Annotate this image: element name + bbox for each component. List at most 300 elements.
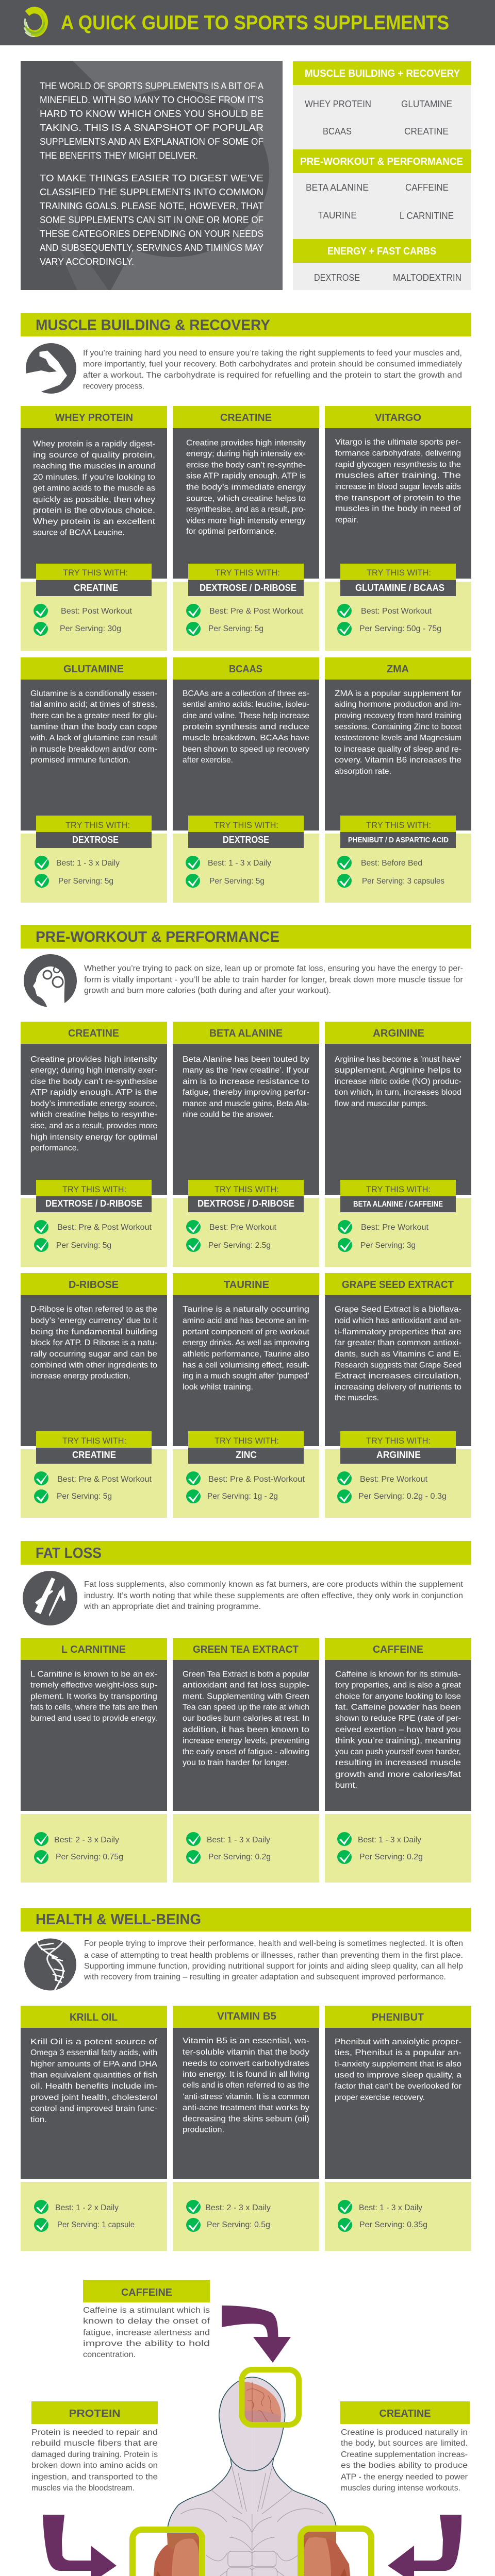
dosage [35, 856, 120, 888]
dosage: Best: Pre & Post Workout [57, 1223, 152, 1232]
description: into energy. It is found in all living [183, 2070, 309, 2079]
dosage: Per Serving: 5g [208, 624, 263, 633]
dosage: Best: 1 - 3 x Daily [359, 2204, 422, 2212]
dosage [186, 604, 304, 636]
description: ercise the body can’t re-synthe- [186, 461, 306, 470]
description: ing in a much sought after ’pumped’ [183, 1371, 309, 1381]
description: ti-anxiety supplement that is also [335, 2060, 461, 2069]
dosage: Per Serving: 0.75g [56, 1853, 123, 1861]
section heading: pre-workout and performance [21, 925, 471, 948]
dosage [34, 1471, 152, 1503]
intro text: SUPPLEMENTS AND AN EXPLANATION OF SOME OF [40, 137, 263, 147]
callout: protein: Protein is needed to repair and [31, 2428, 158, 2437]
card title: GREEN TEA EXTRACT [193, 1644, 299, 1655]
dosage: Per Serving: 0.2g [208, 1853, 271, 1861]
callout: creatine: the body, but sources are limited. [341, 2439, 468, 2448]
section heading: pre-workout and performance: PRE-WORKOUT & PERFORMANCE [36, 929, 279, 945]
description: think you’re training), meaning [335, 1736, 461, 1745]
category: energy: DEXTROSE [314, 273, 360, 283]
description: cells and is often referred to as the [183, 2081, 309, 2090]
try this with: TRY THIS WITH: [366, 820, 431, 830]
description: Creatine provides high intensity [186, 439, 306, 447]
try this with: DEXTROSE [223, 835, 269, 845]
description: used to improve sleep quality, a [335, 2071, 461, 2079]
category: muscle building: BCAAS [323, 126, 352, 137]
try this with: TRY THIS WITH: [214, 1436, 279, 1446]
callout: protein: rebuild muscle fibers that are [31, 2439, 158, 2448]
dosage: Per Serving: 50g - 75g [359, 624, 441, 633]
description: decreasing the skins sebum (oil) [183, 2114, 309, 2124]
description: higher amounts of EPA and DHA [30, 2060, 157, 2069]
card title: GLUTAMINE [63, 664, 124, 675]
section intro: pre-workout: form is vitally important - you’ll be able to train harder for longer, break down more muscle tissue for [84, 976, 464, 984]
try this with: TRY THIS WITH: [366, 1184, 431, 1194]
description: rapid glycogen resynthesis to the [335, 461, 461, 469]
description [183, 1670, 310, 1767]
description: after exercise. [183, 756, 233, 765]
body silhouette [146, 2377, 358, 2576]
description: energy; during high intensity ex- [186, 449, 306, 459]
description: far greater than common antioxi- [335, 1338, 461, 1347]
highlight: right arm muscles [301, 2529, 371, 2576]
description: high intensity energy for optimal [30, 1133, 157, 1142]
dosage [338, 1220, 429, 1252]
try this with: TRY THIS WITH: [62, 1436, 126, 1446]
description: combined with other ingredients to [30, 1361, 157, 1369]
card title: ARGININE [373, 1028, 424, 1039]
description: addition, it has been known to [183, 1725, 309, 1734]
description: increase energy levels, preventing [183, 1736, 309, 1745]
description: control and improved brain func- [30, 2104, 157, 2113]
section intro: muscle: If you’re training hard you need to ensure you’re taking the right supplements to feed your muscles and, [83, 349, 462, 358]
dosage: Best: Before Bed [361, 859, 422, 868]
description: production. [183, 2126, 224, 2134]
description: muscle breakdown. BCAAs have [183, 734, 309, 742]
description: source of BCAA Leucine. [33, 529, 125, 537]
description: oil. Health benefits include im- [30, 2082, 157, 2091]
dosage: Best: Pre & Post-Workout [208, 1475, 305, 1484]
try this with: GLUTAMINE / BCAAS [355, 583, 444, 593]
description: L Carnitine is known to be an ex- [30, 1670, 157, 1679]
description: performance. [30, 1144, 79, 1153]
section intro: fat loss [84, 1580, 464, 1611]
try this with: TRY THIS WITH: [65, 820, 130, 830]
dosage: Best: Post Workout [61, 607, 133, 616]
description: absorption rate. [335, 767, 391, 776]
try this with: TRY THIS WITH: [214, 1184, 279, 1194]
description: noid which has antioxidant and an- [335, 1316, 461, 1325]
description: Creatine provides high intensity [30, 1055, 157, 1064]
description: athletic performance, Taurine also [183, 1350, 309, 1359]
card title: TAURINE [224, 1279, 269, 1291]
dosage [337, 1832, 423, 1864]
description: sential amino acids: leucine, isoleu- [183, 700, 309, 709]
description [183, 1305, 310, 1392]
description: burnt. [335, 1781, 357, 1790]
callout: creatine [340, 2401, 470, 2493]
description: burned and used to provide energy. [30, 1714, 157, 1723]
try this with [36, 1431, 152, 1464]
category: pre-workout: CAFFEINE [405, 182, 449, 193]
category: pre-workout: PRE-WORKOUT & PERFORMANCE [300, 156, 463, 167]
card: whey protein [21, 406, 167, 651]
description: tion which, in turn, increases blood [335, 1088, 461, 1097]
description: choice for anyone looking to lose [335, 1692, 461, 1701]
description: tial amino acid; at times of stress, [30, 700, 157, 709]
card title: BETA ALANINE [209, 1028, 283, 1039]
card: krill oil [21, 2006, 167, 2251]
callout: caffeine: improve the ability to hold [83, 2339, 210, 2348]
dosage [186, 1220, 277, 1252]
description: the body’s immediate energy [186, 483, 306, 492]
description [30, 1670, 157, 1723]
section heading: muscle building and recovery [21, 313, 471, 336]
description: increase energy production. [30, 1371, 130, 1381]
description: muscles in the body in need of [335, 504, 461, 513]
card: vitamin b5 [173, 2006, 319, 2251]
section intro: muscle: recovery process. [83, 382, 144, 391]
description [183, 1055, 310, 1119]
callout: caffeine: fatigue, increase alertness and [83, 2329, 210, 2337]
dosage: Best: Pre & Post Workout [209, 607, 304, 616]
try this with: TRY THIS WITH: [366, 1436, 431, 1446]
description: growth and more calories/fat [335, 1770, 461, 1779]
description: repair. [335, 516, 358, 524]
dosage [34, 604, 133, 636]
section intro: health [84, 1939, 463, 1981]
description: Omega 3 essential fatty acids, with [30, 2048, 157, 2057]
callout: caffeine: CAFFEINE [121, 2287, 172, 2298]
description: for optimal performance. [186, 527, 276, 536]
section heading: fat loss: FAT LOSS [36, 1545, 102, 1562]
dosage: Per Serving: 2.5g [208, 1241, 271, 1250]
category: energy: ENERGY + FAST CARBS [327, 246, 436, 257]
description: sise, and as a result, provides more [30, 1122, 157, 1130]
description: energy; during high intensity exer- [30, 1066, 157, 1075]
dosage: Per Serving: 5g [56, 1241, 111, 1250]
section intro: pre-workout: Whether you’re trying to pack on size, lean up or promote fat loss, ensuring you have the energy to per- [84, 964, 463, 973]
section heading: health and well-being [21, 1908, 471, 1931]
icon: head with gears [24, 954, 77, 1008]
card: vitargo [325, 406, 471, 651]
description [335, 1055, 461, 1108]
callout: creatine: ATP - the energy needed to power [341, 2473, 468, 2481]
dosage: Best: 1 - 3 x Daily [56, 859, 120, 868]
card title: KRILL OIL [70, 2012, 118, 2023]
dosage [337, 604, 441, 636]
try this with [340, 564, 456, 596]
dosage [34, 2200, 135, 2232]
description [183, 689, 309, 765]
try this with: CREATINE [72, 1450, 116, 1460]
highlight: brain [242, 2370, 299, 2425]
description: Whey protein is a rapidly digest- [33, 440, 155, 448]
category: pre-workout [293, 149, 471, 221]
description: antioxidant and fat loss supple- [183, 1681, 309, 1690]
description: proper exercise recovery. [335, 2093, 425, 2102]
intro text: TO MAKE THINGS EASIER TO DIGEST WE’VE [40, 173, 263, 183]
dosage [34, 1832, 123, 1864]
dosage [186, 2200, 271, 2232]
dosage: Per Serving: 0.35g [359, 2221, 427, 2229]
category: muscle building: MUSCLE BUILDING + RECOVERY [305, 68, 460, 79]
description: testosterone levels and Magnesium [335, 734, 461, 742]
description: flow and muscular pumps. [335, 1099, 428, 1108]
description: fat. Caffeine powder has been [335, 1703, 461, 1711]
description: supplement. Arginine helps to [335, 1066, 461, 1075]
description: our bodies burn calories at rest. In [183, 1714, 309, 1723]
intro text [40, 81, 263, 267]
dosage: Best: 2 - 3 x Daily [205, 2204, 271, 2212]
description: proving recovery from hard training [335, 711, 461, 720]
callout: caffeine [83, 2280, 210, 2359]
description: look whilst training. [183, 1383, 253, 1392]
callout: protein: PROTEIN [69, 2408, 121, 2419]
icon: ruler and compass [23, 1571, 77, 1625]
description: you can push yourself even harder, [335, 1748, 461, 1756]
dosage: Per Serving: 0.5g [207, 2221, 270, 2229]
intro text: CLASSIFIED THE SUPPLEMENTS INTO COMMON [40, 187, 263, 197]
try this with [36, 564, 152, 596]
callout: protein: ingestion, and transported to the [31, 2473, 158, 2481]
description: resynthesise, and as a result, pro- [186, 505, 306, 514]
panel: category index [293, 61, 471, 290]
description [30, 2038, 158, 2124]
description: tremely effective weight-loss sup- [30, 1681, 157, 1690]
try this with [340, 1180, 456, 1212]
card title: ZMA [387, 664, 409, 675]
dosage: Best: Pre & Post Workout [57, 1475, 152, 1484]
description: formance carbohydrate, delivering [335, 449, 461, 457]
description: source, which creatine helps to [186, 495, 306, 503]
try this with: PHENIBUT / D ASPARTIC ACID [348, 836, 449, 844]
description: aiding hormone production and im- [335, 700, 461, 709]
description: protein is the obvious choice. [33, 506, 155, 515]
icon: bulk powders ring logo [24, 10, 45, 37]
description: fats to cells, where the fats are then [30, 1703, 157, 1711]
description: energy drinks. As well as improving [183, 1338, 309, 1347]
description: Caffeine is known for its stimula- [335, 1670, 461, 1679]
card title: CAFFEINE [373, 1644, 423, 1655]
card: glutamine [21, 657, 167, 903]
card title: PHENIBUT [372, 2012, 424, 2023]
category: muscle building: GLUTAMINE [401, 99, 452, 109]
description: rally occurring sugar and can be [30, 1350, 157, 1359]
section heading: health and well-being: HEALTH & WELL-BEING [36, 1911, 201, 1928]
card: green tea extract [173, 1638, 319, 1883]
description: tory properties, and is also a great [335, 1681, 461, 1690]
anatomy figure [133, 2370, 371, 2576]
description: sessions. Containing Zinc to boost [335, 722, 462, 732]
intro text: TRAINING GOALS. PLEASE NOTE, HOWEVER, THAT [40, 201, 263, 211]
try this with [188, 1431, 304, 1464]
try this with: DEXTROSE / D-RIBOSE [45, 1198, 142, 1209]
description: body’s ‘energy currency’ due to it [30, 1316, 158, 1325]
section intro: health: a case of attempting to treat health problems or illnesses, rather than preventing them in the first place. [84, 1951, 463, 1960]
card: creatine performance [21, 1022, 167, 1267]
description: covery. Vitamin B6 increases the [335, 756, 461, 765]
dosage [186, 1471, 305, 1503]
description: you to train harder for longer. [183, 1758, 289, 1767]
description [335, 689, 462, 776]
description: the early onset of fatigue - allowing [183, 1748, 309, 1756]
description: Extract increases circulation, [335, 1371, 461, 1381]
highlight: left arm muscles [133, 2530, 202, 2576]
description: ATP rapidly enough. ATP is the [30, 1088, 157, 1097]
description [335, 1670, 461, 1790]
dosage: Per Serving: 1 capsule [57, 2221, 135, 2229]
card: taurine [173, 1273, 319, 1518]
description: get amino acids to the muscle as [33, 484, 155, 493]
description: plement. It works by transporting [30, 1692, 157, 1701]
section intro: fat loss: industry. It’s worth noting that while these supplements are often effective, they only work in conjunction [84, 1591, 463, 1600]
description: vides more high intensity energy [186, 516, 306, 526]
description [30, 689, 158, 765]
description: being the fundamental building [30, 1328, 157, 1336]
description: Krill Oil is a potent source of [30, 2038, 158, 2046]
description: body’s immediate energy source, [30, 1099, 157, 1108]
callout: protein: broken down into amino acids on [31, 2461, 158, 2470]
intro text: HARD TO KNOW WHICH ONES YOU SHOULD BE [40, 109, 263, 119]
category: pre-workout: L CARNITINE [400, 211, 454, 221]
arrow: protein to arm [43, 2515, 117, 2576]
description: D-Ribose is often referred to as the [30, 1305, 157, 1314]
try this with: ARGININE [376, 1450, 421, 1460]
card title: VITAMIN B5 [217, 2011, 276, 2022]
card title: BCAAS [229, 664, 262, 675]
description [335, 1305, 461, 1402]
description: Arginine has become a ’must have’ [335, 1055, 461, 1064]
description: proved joint health, cholesterol [30, 2093, 157, 2102]
dosage [34, 1220, 152, 1252]
arrow: caffeine to brain [222, 2306, 291, 2363]
description: reaching the muscles in around [33, 462, 155, 471]
section intro: muscle [83, 349, 462, 391]
description: Grape Seed Extract is a bioflava- [335, 1305, 461, 1314]
description: increase in blood sugar levels aids [335, 482, 461, 492]
panel: introduction [21, 61, 283, 290]
dosage: Best: 1 - 3 x Daily [208, 859, 271, 868]
description: cise the body can’t re-synthesise [30, 1077, 157, 1086]
dosage [186, 856, 271, 888]
description: Tea can speed up the rate at which [183, 1703, 309, 1711]
callout: caffeine: Caffeine is a stimulant which is [83, 2306, 210, 2315]
category: muscle building: CREATINE [404, 126, 449, 137]
description: portant component of pre workout [183, 1328, 310, 1336]
section heading: fat loss [21, 1541, 471, 1565]
intro text: TAKING. THIS IS A SNAPSHOT OF POPULAR [40, 123, 263, 133]
dosage: Per Serving: 0.2g - 0.3g [358, 1492, 447, 1501]
header band [0, 0, 495, 45]
dosage: Best: 1 - 3 x Daily [207, 1836, 270, 1844]
card: phenibut [325, 2006, 471, 2251]
description: Whey protein is an excellent [33, 517, 156, 526]
description: ment. Supplementing with Green [183, 1692, 309, 1701]
intro text: AND SUBSEQUENTLY, SERVINGS AND TIMINGS MAY [40, 243, 263, 253]
dosage [337, 1471, 447, 1503]
callout: protein: damaged during training. Protein is [31, 2450, 158, 2459]
dosage: Per Serving: 5g [57, 1492, 112, 1501]
card: zma [325, 657, 471, 903]
description: muscles after training. The [335, 471, 461, 480]
try this with: DEXTROSE / D-RIBOSE [200, 583, 296, 593]
section intro: muscle: more importantly, fuel your recovery. Both carbohydrates and protein should be consumed immediately [83, 360, 462, 369]
section intro: fat loss: Fat loss supplements, also commonly known as fat burners, are core products within the supplement [84, 1580, 464, 1589]
section intro: health: Supporting immune function, providing nutritional support for joints and aiding sleep quality, can all help [84, 1962, 463, 1971]
description: promised immune function. [30, 756, 130, 765]
dosage: Best: Pre Workout [209, 1223, 277, 1232]
card title: VITARGO [375, 412, 421, 423]
section intro: pre-workout [84, 964, 464, 995]
intro text: THE WORLD OF SPORTS SUPPLEMENTS IS A BIT OF A [40, 81, 263, 91]
description: Vitargo is the ultimate sports per- [335, 438, 461, 447]
dosage: Per Serving: 3 capsules [362, 877, 444, 886]
card title: CREATINE [220, 412, 272, 423]
description: tion. [30, 2115, 47, 2124]
card: creatine [173, 406, 319, 651]
card title: WHEY PROTEIN [55, 412, 133, 423]
description: mance and muscle gains, Beta Ala- [183, 1099, 309, 1108]
description [30, 1305, 158, 1381]
try this with: DEXTROSE [72, 835, 119, 845]
callout: protein: muscles via the bloodstream. [31, 2484, 135, 2493]
description: fatigue, thereby improving perfor- [183, 1088, 309, 1097]
callout: creatine: es the bodies ability to produce [341, 2461, 468, 2470]
description: aim is to increase resistance to [183, 1077, 309, 1086]
section intro: health: with recovery from training – resulting in greater adaptation and subsequent improved performance. [84, 1973, 446, 1981]
description: Phenibut with anxiolytic proper- [335, 2038, 461, 2046]
dosage: Per Serving: 0.2g [359, 1853, 423, 1861]
try this with: TRY THIS WITH: [63, 568, 128, 578]
dosage: Per Serving: 3g [360, 1241, 416, 1250]
description: many as the ’new creatine’. If your [183, 1066, 310, 1075]
try this with: BETA ALANINE / CAFFEINE [353, 1200, 443, 1209]
section intro: fat loss: with an appropriate diet and training programme. [84, 1602, 261, 1611]
description: increase nitric oxide (NO) produc- [335, 1077, 461, 1086]
card title: CREATINE [68, 1028, 119, 1039]
description: 20 minutes. If you’re looking to [33, 473, 155, 482]
dosage: Per Serving: 1g - 2g [207, 1492, 278, 1501]
intro text: THESE CATEGORIES DEPENDING ON YOUR NEEDS [40, 229, 263, 239]
card: caffeine [325, 1638, 471, 1883]
dosage [337, 856, 444, 888]
dosage [338, 2200, 427, 2232]
category: energy [293, 239, 471, 283]
description: which creatine helps to resynthe- [30, 1110, 157, 1119]
description: with. A lack of glutamine can result [30, 734, 158, 742]
description: ZMA is a popular supplement for [335, 689, 462, 698]
description: the transport of protein to the [335, 494, 461, 503]
callout: creatine: Creatine is produced naturally in [341, 2428, 468, 2437]
description: amino acid and has become an im- [183, 1316, 309, 1325]
category: energy: MALTODEXTRIN [393, 273, 461, 283]
card: beta alanine [173, 1022, 319, 1267]
description: has a cell volumising effect, result- [183, 1361, 309, 1369]
category: muscle building [293, 61, 471, 137]
description: been shown to speed up recovery [183, 745, 309, 754]
dosage: Best: Post Workout [361, 607, 432, 616]
description: block for ATP. D Ribose is a natu- [30, 1338, 157, 1347]
description: protein synthesis and reduce [183, 722, 309, 732]
callout: caffeine: concentration. [83, 2350, 136, 2359]
description: Taurine is a naturally occurring [183, 1305, 309, 1314]
intro text: THE BENEFITS THEY MIGHT DELIVER. [40, 150, 198, 161]
description: ties, Phenibut is a popular an- [335, 2048, 461, 2057]
callout: creatine: Creatine supplementation increas- [341, 2450, 468, 2459]
dosage [186, 1832, 271, 1864]
description [183, 2037, 309, 2134]
dosage: Per Serving: 30g [60, 624, 121, 633]
